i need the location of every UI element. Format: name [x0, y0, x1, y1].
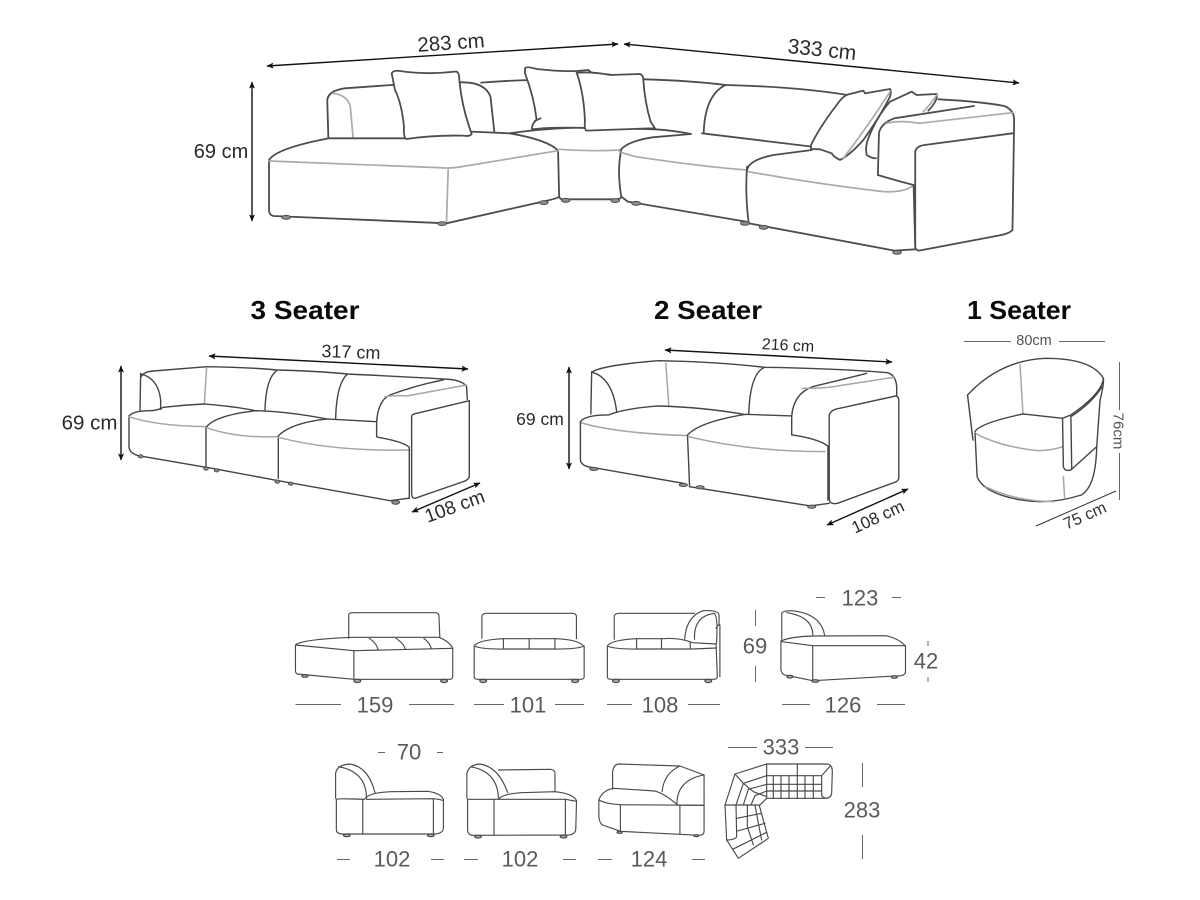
label: 317 cm: 317 cm [321, 341, 381, 363]
label: 108 cm: 108 cm [422, 486, 488, 528]
module: top view plan [725, 764, 832, 858]
dimension: 126: 126 [825, 692, 861, 718]
drawing: 1 seater chair [968, 358, 1104, 502]
arrow: 317 cm width [209, 356, 468, 369]
panel: module drawings row 2 [336, 734, 880, 872]
module: 102 side arm [336, 764, 443, 837]
drawing: 3 seater sofa [129, 367, 469, 504]
module: 159 left chaise [295, 613, 453, 683]
label: 333 cm: 333 cm [787, 35, 857, 65]
dimension: 69 [743, 610, 767, 682]
dimension: 126 [782, 692, 905, 718]
dimension: 102 left [337, 846, 444, 872]
drawing: 2 seater sofa [580, 361, 899, 508]
arrow: 108 cm depth [412, 483, 480, 512]
dimension: 283: 283 [844, 798, 880, 822]
dimension: 123: 123 [842, 586, 878, 610]
dimension: 70: 70 [397, 740, 421, 764]
dimension: 108 [607, 692, 720, 718]
label: 69 cm: 69 cm [62, 412, 117, 434]
arrow: 216 cm width [665, 350, 892, 362]
heading: 1 Seater: 1 Seater [967, 295, 1071, 325]
dimension: 159: 159 [357, 692, 393, 718]
module: 102 arm with back [467, 764, 577, 838]
module: 101 armless [474, 613, 584, 683]
cushions: right [811, 89, 937, 160]
label: 69 cm: 69 cm [194, 141, 248, 163]
arrow: 69 cm height [251, 82, 253, 221]
panel: module drawings row 1 [295, 586, 938, 718]
dimension: 69: 69 [743, 634, 767, 658]
label: 283 cm: 283 cm [417, 29, 485, 57]
dimension: 76cm [1110, 362, 1126, 500]
panel: corner sectional sofa [194, 29, 1019, 254]
feet [282, 198, 901, 254]
arrow: 108 cm depth [827, 489, 908, 525]
panel: 1 seater [964, 295, 1126, 533]
label: 69 cm: 69 cm [516, 409, 564, 429]
dimension: 283 [844, 763, 880, 859]
dimension: 42 [914, 641, 938, 682]
dimension: 101 [474, 692, 584, 718]
label: 216 cm: 216 cm [761, 336, 815, 356]
dimension: 124: 124 [631, 846, 667, 872]
dimension: 76cm: 76cm [1110, 413, 1126, 449]
module: 124 corner [599, 764, 704, 837]
dimension: 333: 333 [763, 734, 799, 760]
dimension: 75 cm: 75 cm [1061, 499, 1109, 533]
heading: 2 Seater: 2 Seater [654, 295, 762, 325]
dimension: 101: 101 [510, 692, 546, 718]
arrow: 333 cm width [624, 44, 1019, 83]
dimension: 124 [598, 846, 705, 872]
dimension: 102 right [464, 846, 576, 872]
module: 108 one arm [607, 611, 720, 683]
panel: 3 seater [62, 295, 488, 528]
dimension: 108: 108 [642, 692, 678, 718]
dimension: 75 cm [1036, 491, 1116, 533]
arrow: 69 cm height [120, 366, 122, 460]
drawing: corner sectional sofa [269, 79, 1014, 254]
dimension: 42: 42 [914, 648, 938, 674]
label: 108 cm: 108 cm [849, 497, 907, 537]
arrow: 283 cm width [267, 44, 618, 66]
dimension: 70 [378, 740, 443, 764]
module: 126 side view [781, 611, 905, 682]
panel: 2 seater [516, 295, 908, 537]
dimension: 102 left: 102 [374, 846, 410, 872]
dimension: 123 [816, 586, 901, 610]
arrow: 69 cm height [568, 367, 570, 469]
dimension: 102 right: 102 [502, 846, 538, 872]
cushions: left and centre [392, 67, 655, 139]
dimension: 333 [728, 734, 833, 760]
dimension: 80cm: 80cm [1016, 333, 1052, 349]
heading: 3 Seater: 3 Seater [250, 295, 360, 325]
